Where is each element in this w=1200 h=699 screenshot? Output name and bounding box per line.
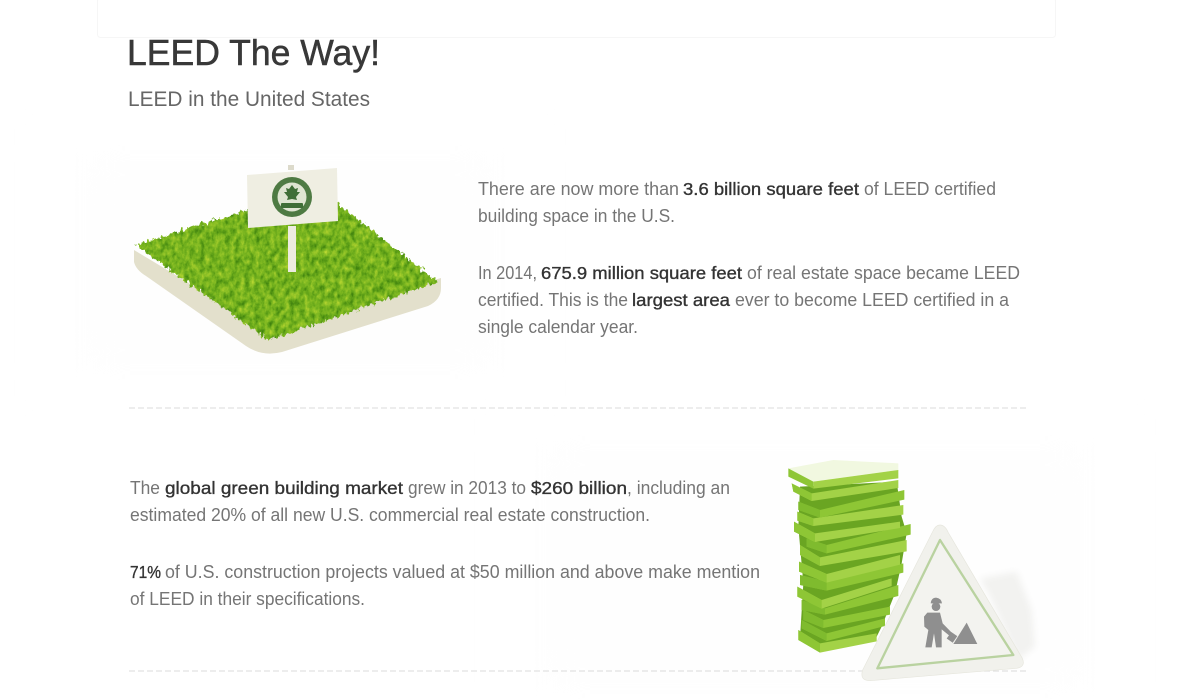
text block: green building market xyxy=(130,478,760,609)
worker icon xyxy=(924,598,977,647)
line 3: 71% xyxy=(130,562,161,582)
line 1: There are now more than xyxy=(478,179,679,199)
line 4 xyxy=(478,290,1010,310)
line 1: , including an xyxy=(627,478,730,498)
line 1 xyxy=(478,179,996,199)
line 3: In 2014, xyxy=(478,263,537,283)
grass top xyxy=(135,188,438,340)
sign shadow xyxy=(980,572,1035,660)
line 4: of LEED in their specifications. xyxy=(130,589,365,609)
illustration: stack of green bills with construction sign xyxy=(788,460,1035,681)
warning sign xyxy=(862,525,1023,681)
sign post xyxy=(288,226,296,272)
stack of bills xyxy=(788,460,911,653)
LEED logo xyxy=(272,177,312,217)
line 1: grew in 2013 to xyxy=(408,478,526,498)
title: LEED The Way! xyxy=(127,32,380,73)
top bill xyxy=(788,460,898,482)
line 1: of LEED certified xyxy=(864,179,996,199)
line 1 xyxy=(130,478,730,498)
line 2: estimated 20% of all new U.S. commercial real estate construction. xyxy=(130,505,650,525)
top navigation box xyxy=(98,0,1056,38)
line 1: $260 billion xyxy=(531,478,627,498)
line 3 xyxy=(478,263,1020,283)
line 1: The xyxy=(130,478,160,498)
line 2: building space in the U.S. xyxy=(478,206,675,226)
turf base xyxy=(134,250,441,354)
line 4: certified. This is the xyxy=(478,290,628,310)
line 4: ever to become LEED certified in a xyxy=(735,290,1010,310)
line 1: global green building market xyxy=(165,478,403,498)
subtitle: LEED in the United States xyxy=(128,88,370,111)
line 5: single calendar year. xyxy=(478,317,638,337)
line 3: 675.9 million square feet xyxy=(541,263,742,283)
line 1: 3.6 billion square feet xyxy=(683,179,859,199)
illustration: grass plot with LEED sign xyxy=(134,165,441,354)
line 3: of U.S. construction projects valued at $50 million and above make mention xyxy=(165,562,760,582)
line 4: largest area xyxy=(632,290,730,310)
sign board xyxy=(247,168,338,228)
line 3: of real estate space became LEED xyxy=(747,263,1020,283)
sign triangle xyxy=(862,525,1023,681)
sign green border xyxy=(877,540,1013,668)
text block: LEED certified space xyxy=(478,179,1020,337)
